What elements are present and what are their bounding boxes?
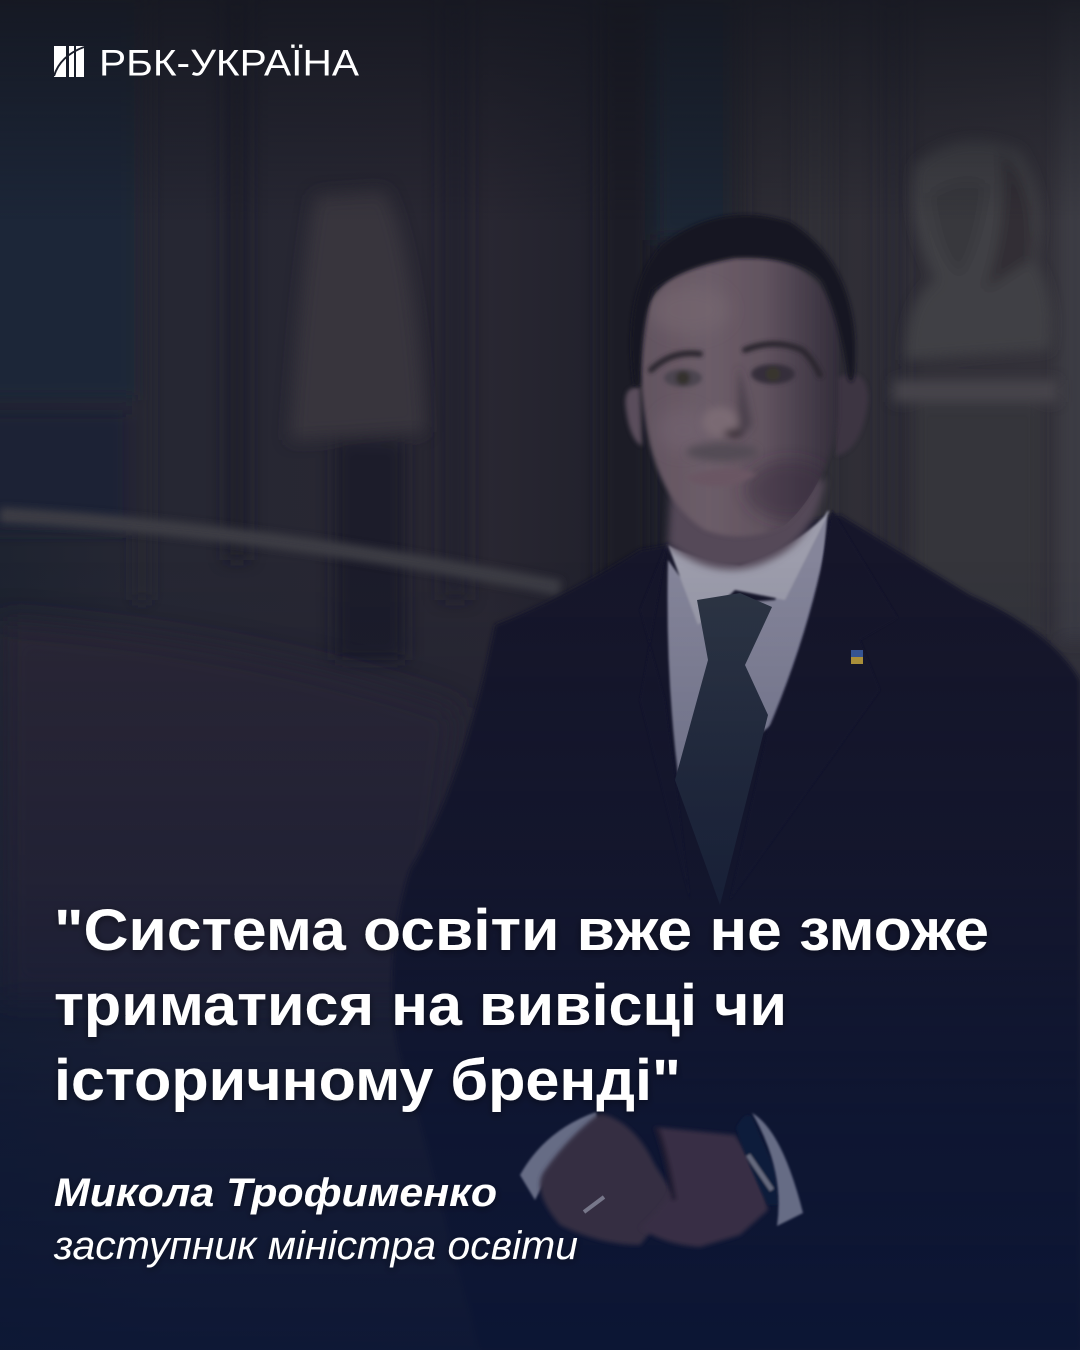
handrail bbox=[0, 515, 560, 588]
mouth bbox=[686, 469, 757, 486]
jacket bbox=[392, 515, 1080, 1350]
quote headline: історичному бренді" bbox=[54, 1048, 681, 1113]
face bbox=[640, 255, 838, 536]
bust on pedestal bbox=[893, 140, 1058, 634]
sofa curve bbox=[0, 620, 460, 1000]
dark vertical wood panels bbox=[225, 0, 1080, 640]
shirt bbox=[668, 510, 830, 790]
left hand bbox=[540, 1113, 678, 1245]
right hand bbox=[640, 1127, 768, 1247]
watch bbox=[736, 1115, 778, 1205]
hands with cuffs and watch bbox=[520, 1112, 803, 1247]
left cuff bbox=[520, 1112, 600, 1200]
tie bbox=[675, 593, 772, 905]
ring bbox=[584, 1197, 604, 1212]
brows bbox=[651, 344, 820, 375]
speaker role: заступник міністра освіти bbox=[53, 1224, 578, 1268]
blue window left bbox=[0, 0, 148, 600]
face shading bbox=[650, 289, 817, 521]
portrait: man in dark suit bbox=[392, 213, 1080, 1202]
right cuff bbox=[752, 1113, 803, 1226]
eyes bbox=[664, 364, 795, 387]
mustache shadow bbox=[686, 443, 758, 461]
hair bbox=[631, 215, 855, 385]
ears bbox=[625, 374, 868, 456]
quote headline: "Система освіти вже не зможе bbox=[54, 898, 989, 963]
neck bbox=[668, 470, 825, 570]
nose bbox=[702, 365, 752, 440]
quote headline bbox=[54, 898, 989, 1113]
lapels bbox=[640, 510, 898, 900]
logo wordmark: РБК-УКРАЇНА bbox=[99, 42, 359, 84]
quote headline: триматися на вивісці чи bbox=[54, 973, 787, 1038]
lamp shade bbox=[290, 190, 425, 660]
logo mark bbox=[54, 46, 84, 77]
pin bbox=[851, 650, 863, 664]
logo: РБК-Україна bbox=[54, 42, 359, 84]
attribution bbox=[53, 1171, 578, 1268]
speaker name: Микола Трофименко bbox=[54, 1171, 497, 1215]
